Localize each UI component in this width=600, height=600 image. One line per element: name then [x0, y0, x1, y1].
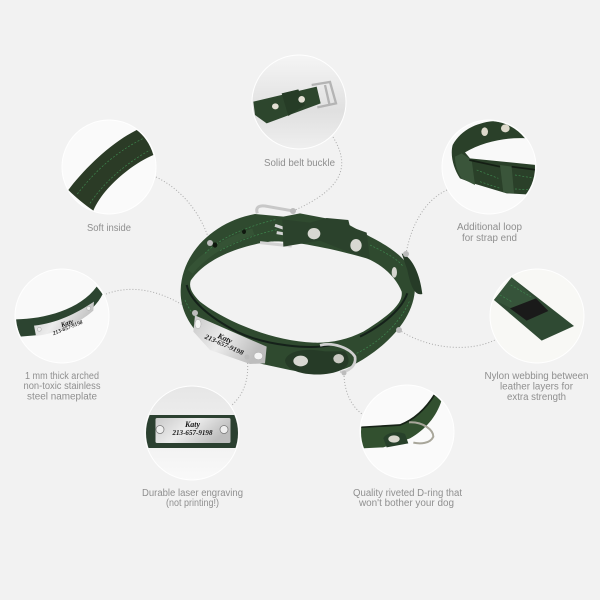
keeper rivets [308, 228, 320, 239]
caption: 1 mm thick arched [25, 371, 99, 382]
callout: arched nameplate: steel nameplate [27, 392, 97, 402]
nameplate rivets [195, 319, 201, 329]
callout: laser engraving: (not printing!) [166, 498, 219, 509]
buckle rear bars [257, 206, 292, 213]
nameplate [193, 315, 267, 364]
D-ring [320, 344, 355, 372]
buckle lower bar and tongue [260, 225, 292, 246]
endpoint dots [192, 208, 409, 376]
callout: nylon webbing [484, 269, 588, 403]
callout: laser engraving [142, 386, 243, 509]
connector: belt buckle [293, 137, 342, 211]
connector: nameplate [106, 289, 195, 313]
inner black edge [187, 285, 407, 347]
engraved phone: 213-657-9198 [203, 332, 245, 357]
callout: D-ring: won't bother your dog [358, 498, 454, 509]
inner lining highlight [190, 232, 253, 272]
callout: soft inside [62, 120, 156, 234]
photo: inner leather [68, 130, 153, 211]
callout: nylon webbing: extra strength [507, 392, 566, 403]
connector: laser engraving [232, 357, 248, 405]
strap end keeper [282, 218, 370, 259]
caption: Quality riveted D-ring that [353, 488, 462, 499]
caption: Nylon webbing between [484, 371, 588, 382]
D-ring rivets [293, 356, 308, 366]
main collar photo [181, 206, 422, 375]
callout: arched nameplate [15, 269, 109, 402]
collar band [181, 213, 415, 373]
photo: riveted D-ring [360, 394, 442, 448]
photo: arched plate: 213-657-9198 [51, 320, 84, 337]
D-ring strap tab [285, 350, 349, 375]
connector: D-ring [344, 373, 362, 414]
photo: layered leather [494, 277, 574, 341]
connector: additional loop [406, 190, 447, 254]
callout: additional loop: for strap end [462, 233, 517, 244]
photo: engraved plate: Katy [184, 420, 201, 429]
connector: soft inside [156, 177, 210, 243]
photo: strap loop [452, 121, 537, 195]
callout: nylon webbing: leather layers for [500, 382, 574, 392]
callout: additional loop [442, 120, 537, 244]
caption: Soft inside [87, 223, 131, 234]
caption: Additional loop [457, 222, 522, 233]
side loop [402, 253, 422, 294]
strap holes [242, 229, 246, 234]
caption: Durable laser engraving [142, 488, 243, 499]
connector: nylon webbing [399, 330, 495, 347]
photo: buckle strap [253, 82, 336, 123]
photo: engraved plate: 213-657-9198 [171, 429, 213, 437]
photo: arched plate: Katy [59, 318, 74, 329]
callout: arched nameplate: non-toxic stainless [24, 381, 100, 392]
engraved name: Katy [215, 331, 234, 346]
photo: engraved plate [146, 415, 240, 448]
callout: belt buckle [252, 55, 346, 169]
callout: D-ring [353, 385, 462, 509]
caption: Solid belt buckle [264, 158, 335, 169]
stitching [185, 219, 410, 353]
photo: arched plate [15, 287, 103, 337]
